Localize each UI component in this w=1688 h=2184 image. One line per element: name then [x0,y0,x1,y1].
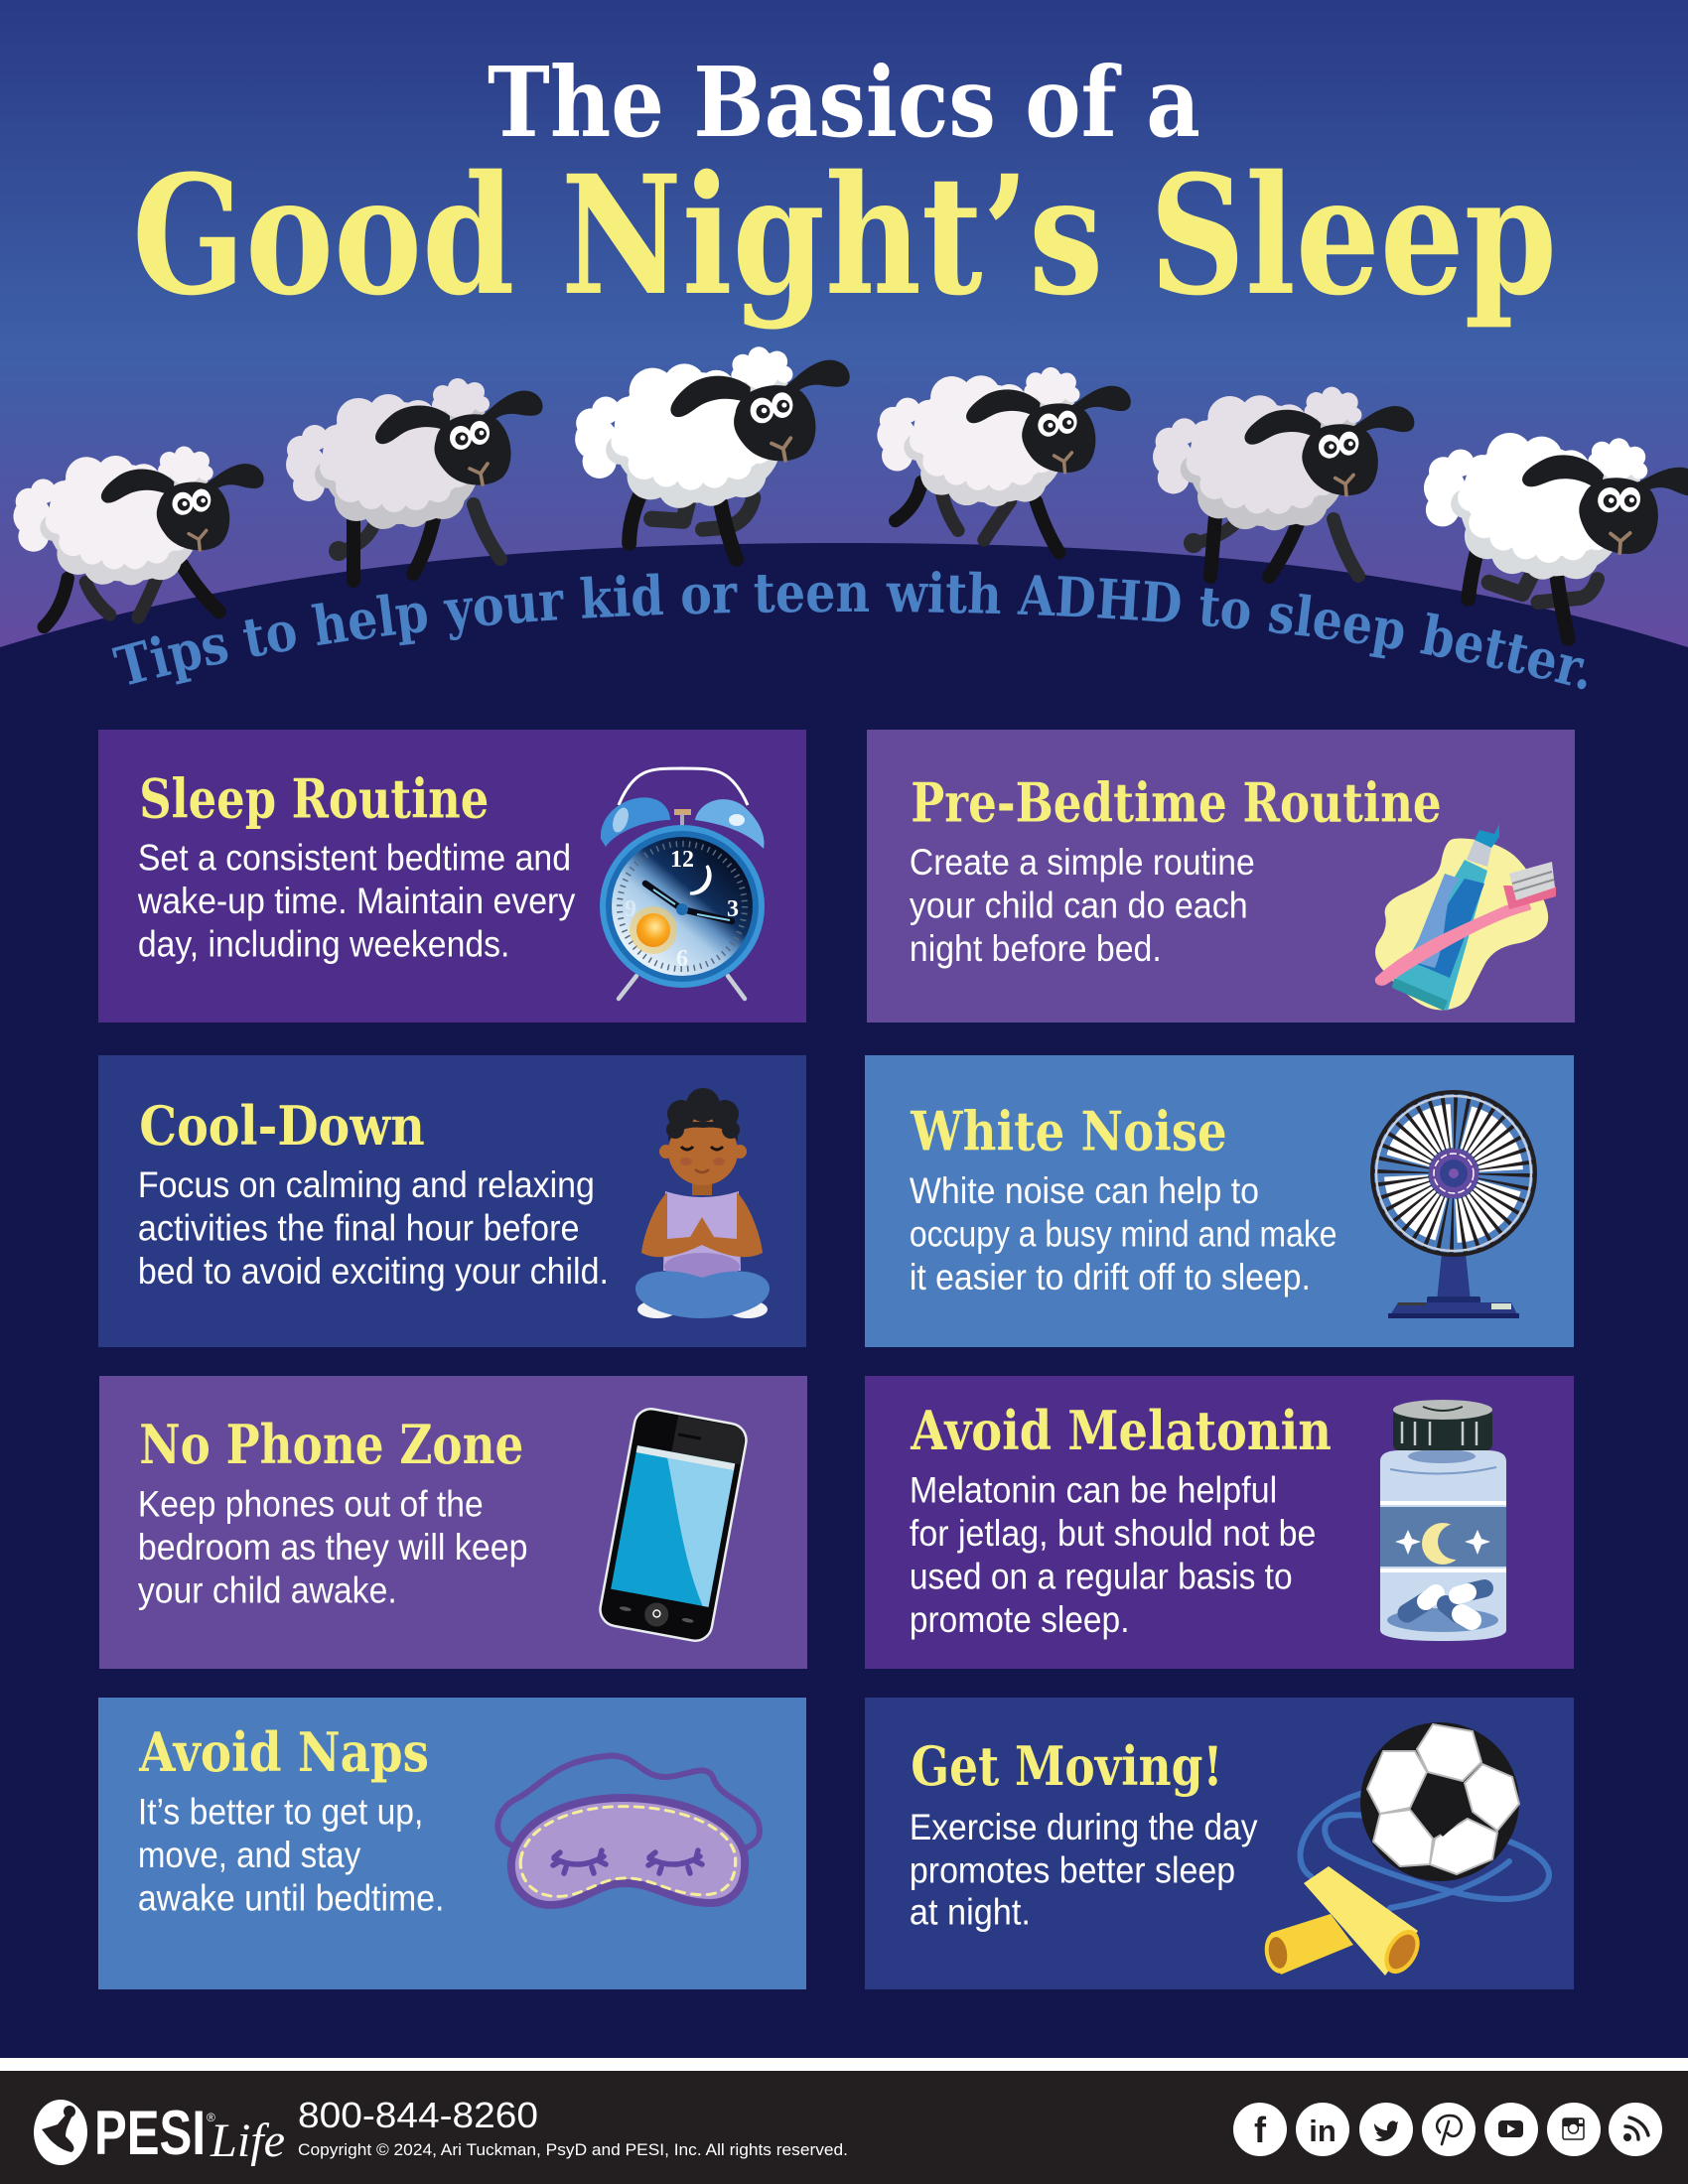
heading: Cool-Down [139,1094,425,1158]
jump rope handles [1262,1866,1427,1979]
panel: sleep routine [98,730,806,1023]
body: It’s better to get up, [138,1790,423,1832]
flock of six sheep [8,346,1688,638]
panel: cool-down [98,1055,806,1347]
body: night before bed. [910,927,1162,969]
body: your child awake. [138,1569,397,1610]
icon: pinterest [1437,2116,1462,2144]
body [910,1468,1316,1640]
icon: rss [1623,2117,1648,2141]
icon: youtube [1498,2120,1523,2137]
body: bedroom as they will keep [138,1526,528,1568]
body: used on a regular basis to [910,1555,1293,1596]
panel: white noise [865,1055,1574,1347]
body: White noise can help to [910,1169,1259,1211]
footer [0,2071,1688,2184]
body [137,837,576,965]
heading: Pre-Bedtime Routine [911,771,1442,835]
icon: melatonin bottle [1380,1400,1506,1641]
heading: Get Moving! [911,1734,1222,1798]
icon: alarm clock [600,768,765,999]
body: Focus on calming and relaxing [138,1163,595,1205]
logo: PESI Life: PESI [94,2099,206,2168]
body [910,841,1255,969]
body: Create a simple routine [910,841,1255,883]
body [138,1790,444,1918]
icon: electric fan [1372,1092,1535,1318]
panel: pre-bedtime routine [867,730,1575,1023]
logo: PESI Life [34,2099,285,2168]
phone number: 800-844-8260 [298,2095,538,2135]
text: get moving [910,1734,1258,1932]
white footer stripe [0,2058,1688,2071]
body [138,1163,609,1292]
body: awake until bedtime. [138,1876,444,1918]
logo: PESI Life: Life [210,2115,285,2167]
body: it easier to drift off to sleep. [910,1256,1311,1297]
sheep 2 [286,378,543,581]
sheep 6 [1408,395,1688,638]
icon: meditating child [635,1088,770,1318]
body: your child can do each [910,884,1248,925]
soccer ball [1360,1722,1519,1881]
icon: toothbrush and toothpaste [1375,824,1556,1011]
icon: instagram [1563,2118,1584,2139]
body: move, and stay [138,1834,361,1875]
body: wake-up time. Maintain every [137,880,576,921]
body: bed to avoid exciting your child. [138,1250,609,1292]
night sky background [0,0,1688,655]
icon: soccer ball and jump rope [1262,1722,1549,1979]
body: promote sleep. [910,1598,1130,1640]
body: occupy a busy mind and make [910,1212,1336,1254]
clock numerals: 12 [670,847,694,873]
icon: sleep mask [497,1756,760,1905]
body: Melatonin can be helpful [910,1468,1277,1510]
text: pre-bedtime routine [910,771,1442,969]
panel: avoid melatonin [865,1376,1574,1669]
body: for jetlag, but should not be [910,1512,1316,1554]
body: at night. [910,1890,1031,1932]
jump rope [1301,1793,1549,1908]
heading: Sleep Routine [139,766,489,830]
text: avoid melatonin [910,1399,1332,1640]
title [132,46,1557,332]
copyright: Copyright © 2024, Ari Tuckman, PsyD and PESI, Inc. All rights reserved. [298,2140,848,2159]
panel: avoid naps [98,1698,806,1989]
body: activities the final hour before [138,1207,579,1249]
title line 1: The Basics of a [488,46,1200,159]
heading: Avoid Naps [138,1720,429,1784]
icon: smartphone [598,1406,749,1644]
body: promotes better sleep [910,1848,1235,1890]
sheep 1 [8,432,266,626]
clock numerals: 3 [727,896,739,922]
body: Set a consistent bedtime and [138,837,571,879]
heading: White Noise [910,1100,1227,1163]
body [910,1169,1336,1297]
heading: Avoid Melatonin [910,1399,1332,1462]
panel: get moving [865,1698,1574,1989]
sheep 5 [1146,369,1417,577]
clock numerals: 6 [676,946,688,972]
heading: No Phone Zone [139,1413,523,1476]
text: no phone zone [138,1413,528,1610]
body [138,1482,528,1610]
body: Exercise during the day [910,1806,1258,1847]
text: cool-down [138,1094,609,1292]
body: day, including weekends. [138,923,509,965]
sheep 4 [871,349,1134,552]
logo: PESI Life: ® [207,2111,215,2124]
panel: no phone zone [99,1376,807,1669]
sheep 3 [575,346,850,559]
icon: facebook: f [1254,2110,1267,2150]
curved subtitle: Tips to help your kid or teen with ADHD to sleep better. [111,571,1587,689]
text: sleep routine [137,766,576,965]
body: Keep phones out of the [138,1482,484,1524]
clock numerals [625,847,739,972]
icon: twitter [1374,2120,1398,2141]
clock numerals: 9 [625,896,636,922]
icon: linkedin: in [1309,2114,1336,2148]
text: white noise [910,1100,1336,1297]
body [910,1806,1258,1932]
social icons [1233,2103,1662,2156]
hill [0,543,1688,2058]
text: avoid naps [138,1720,444,1918]
